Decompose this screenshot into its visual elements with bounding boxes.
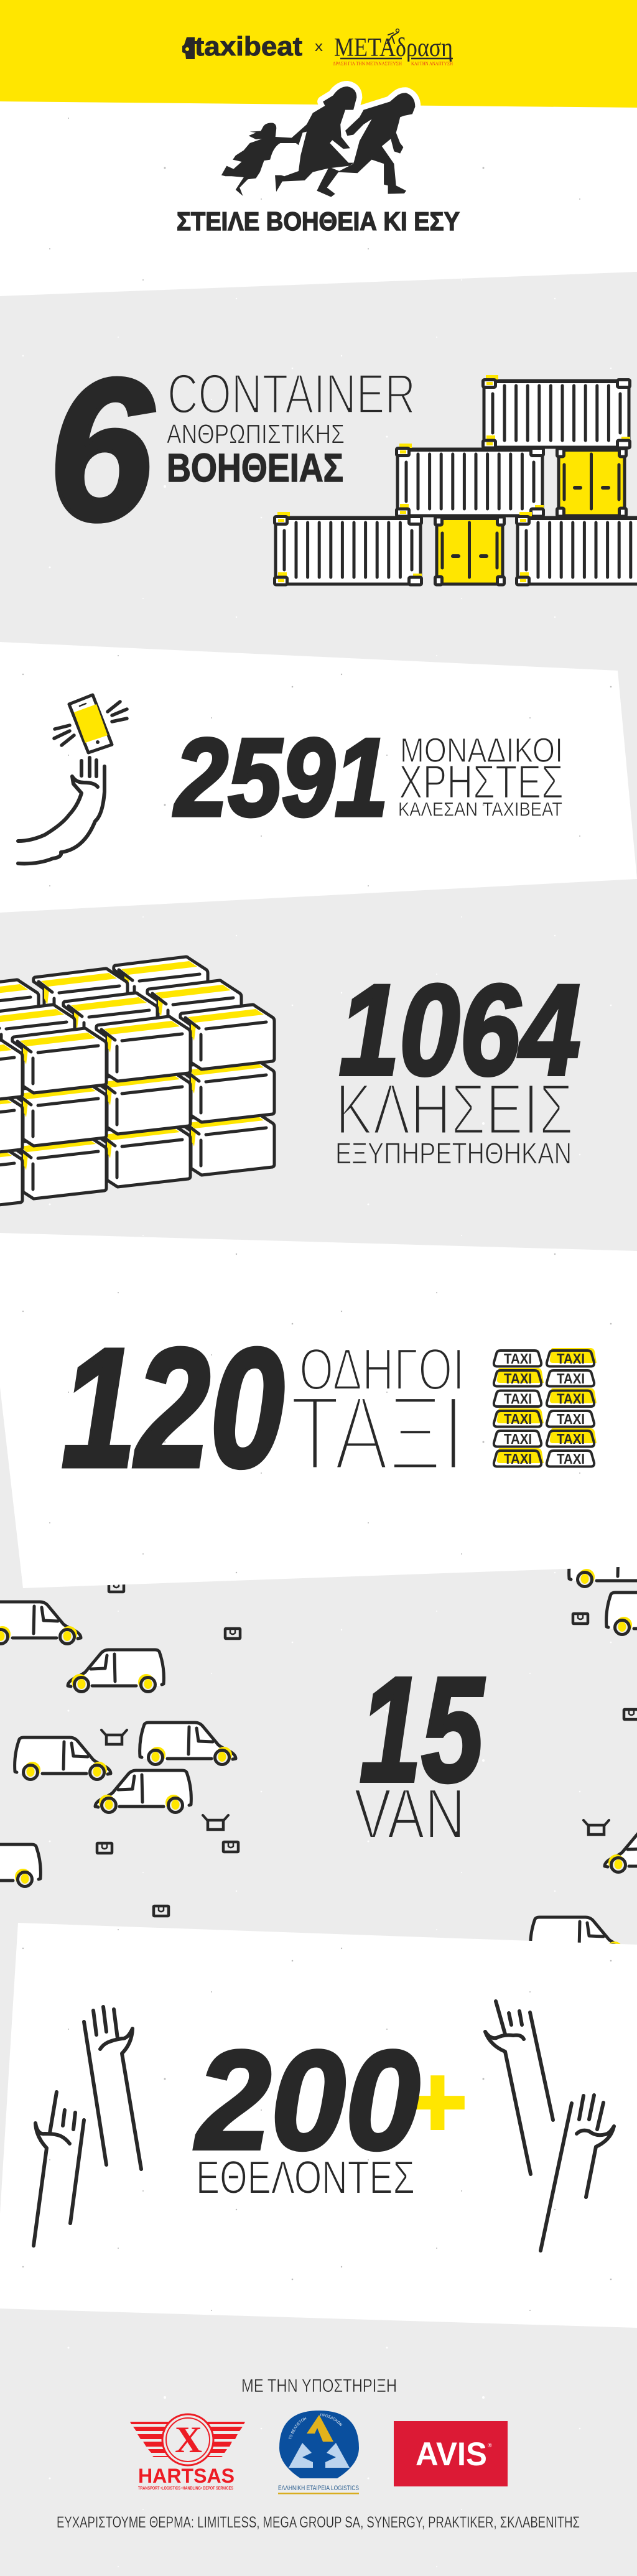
- sign r3c1: [494, 1391, 541, 1407]
- logo: Avis: [394, 2421, 508, 2486]
- sign r2c2: TAXI: [557, 1370, 585, 1387]
- panel: users white band: [0, 642, 637, 913]
- number: plus sign: +: [406, 2044, 465, 2159]
- sign r5c1: [494, 1431, 541, 1447]
- logo: Hellenic Logistics Association: ΠΡΟΣΔΟΚΩΝ: [320, 2414, 342, 2426]
- number: 15: 15: [360, 1646, 485, 1813]
- sign r1c2: TAXI: [557, 1351, 585, 1367]
- sign r2c1: TAXI: [504, 1370, 532, 1387]
- sign r3c2: TAXI: [557, 1391, 585, 1407]
- container: bottom left: [275, 512, 422, 585]
- sign r4c2: TAXI: [557, 1411, 585, 1427]
- sign r6c1: [494, 1448, 544, 1467]
- text: with the support of: ΜΕ ΤΗΝ ΥΠΟΣΤΗΡΙΞΗ: [241, 2376, 397, 2396]
- box: closed 4: [97, 1843, 112, 1853]
- logo: Avis: ®: [488, 2442, 492, 2448]
- logo: Hartsas: TRANSPORT •LOGISTICS •HANDLING• DEPOT SERVICES: [138, 2485, 233, 2491]
- logo: Metadrasi: ΔΡΑΣΗ ΓΙΑ ΤΗΝ ΜΕΤΑΝΑΣΤΕΥΣΗ: [333, 61, 402, 67]
- text: humanitarian: ΑΝΘΡΩΠΙΣΤΙΚΗΣ: [167, 419, 345, 449]
- van: centre left: [14, 1737, 111, 1779]
- vibration lines: [54, 702, 127, 745]
- box: closed 1: [109, 1582, 124, 1592]
- icon: raised hand, far left: [34, 2092, 84, 2246]
- text: called taxibeat: ΚΑΛΕΣΑΝ TAXIBEAT: [398, 797, 562, 820]
- icon: raised hand, inner right: [485, 2001, 553, 2174]
- sign r5c2: [547, 1428, 597, 1447]
- text: users: ΧΡΗΣΤΕΣ: [399, 756, 564, 809]
- illustration: stacked cardboard boxes: [0, 957, 274, 1211]
- sign r2c2: [547, 1370, 594, 1387]
- van: upper left: [0, 1602, 81, 1644]
- van: right edge: [606, 1593, 637, 1635]
- sign r1c1: [494, 1351, 541, 1367]
- box: open 2: [203, 1815, 228, 1830]
- sign r4c1: TAXI: [504, 1411, 532, 1427]
- panel: intro white band: [0, 101, 637, 296]
- container: middle door: [557, 448, 626, 516]
- text: taxi: ΤΑΞΙ: [290, 1374, 465, 1493]
- van: lower right: [605, 1830, 637, 1872]
- icon: running family silhouette: [221, 86, 415, 197]
- box: closed 6: [154, 1906, 169, 1916]
- panel: volunteers white band: [0, 1923, 637, 2328]
- text: unique: ΜΟΝΑΔΙΚΟΙ: [400, 730, 563, 770]
- sign r5c1: TAXI: [504, 1431, 532, 1447]
- sign r6c2: TAXI: [557, 1451, 585, 1467]
- number: 120: 120: [62, 1313, 284, 1502]
- text: served: ΕΞΥΠΗΡΕΤΗΘΗΚΑΝ: [335, 1137, 572, 1171]
- number: 2591: 2591: [173, 715, 388, 839]
- text: aid: ΒΟΗΘΕΙΑΣ: [167, 445, 343, 490]
- logo: Hartsas: HARTSAS: [138, 2465, 235, 2487]
- icon grid: taxi roof signs: [494, 1348, 597, 1467]
- panel: yellow header band: [0, 0, 637, 108]
- number: 1064: 1064: [339, 958, 580, 1102]
- container: bottom right: [516, 512, 637, 585]
- box: closed 3: [573, 1614, 588, 1624]
- van: bottom right clipped: [530, 1917, 626, 1960]
- text: cross mark between logos: x: [315, 39, 323, 54]
- van: lower left clipped: [0, 1844, 41, 1886]
- logo: taxibeat: taxibeat: [195, 32, 302, 62]
- number: 6 containers: 6: [49, 337, 154, 562]
- van: centre lower: [95, 1770, 192, 1813]
- logo: Hartsas: [130, 2414, 245, 2491]
- box: open 3: [584, 1820, 609, 1834]
- van: top right: [569, 1545, 637, 1586]
- container: middle side: [397, 444, 544, 516]
- logo: Metadrasi: ΚΑΙ ΤΗΝ ΑΝΑΠΤΥΞΗ: [411, 61, 453, 67]
- logo: Hellenic Logistics Association: ΕΛΛΗΝΙΚΗ ΕΤΑΙΡΕΙΑ LOGISTICS: [278, 2485, 359, 2492]
- logo: Metadrasi: ΜΕΤΑδραση: [334, 34, 453, 62]
- sign r3c2: [547, 1388, 597, 1407]
- number: 200: 200: [194, 2021, 420, 2178]
- panel: drivers white band: [0, 1233, 637, 1588]
- van: second left: [68, 1650, 164, 1692]
- box: open 1: [101, 1730, 127, 1744]
- box: closed 2: [225, 1629, 240, 1639]
- text: volunteers: ΕΘΕΛΟΝΤΕΣ: [196, 2151, 415, 2203]
- text: drivers: ΟΔΗΓΟΙ: [299, 1336, 465, 1403]
- box: closed 7: [624, 1709, 637, 1719]
- section 6: vans and boxes illustration on grey band: [0, 1545, 637, 1960]
- sign r3c1: TAXI: [504, 1391, 532, 1407]
- box: closed 5: [223, 1842, 238, 1852]
- icon: hand tossing phone: [18, 695, 127, 863]
- arm and fingers: [18, 758, 105, 863]
- logo: Metadrasi: [333, 29, 453, 67]
- sign r1c1: TAXI: [504, 1351, 532, 1367]
- illustration: stacked containers: [275, 375, 637, 585]
- phone: [69, 695, 112, 753]
- sign r6c1: TAXI: [504, 1451, 532, 1467]
- sign r2c1: [494, 1368, 544, 1387]
- sign r4c2: [547, 1411, 594, 1427]
- icon: raised hand, inner left: [84, 2007, 141, 2169]
- text: CONTAINER: CONTAINER: [167, 363, 416, 425]
- container: top: [483, 375, 630, 448]
- heading: main title: ΣΤΕΙΛΕ ΒΟΗΘΕΙΑ ΚΙ ΕΣΥ: [177, 207, 460, 236]
- icon: raised hand, far right: [541, 2095, 614, 2251]
- sign r1c2: [547, 1348, 597, 1367]
- sign r4c1: [494, 1408, 544, 1427]
- logo: Avis: AVIS: [416, 2436, 487, 2473]
- logo: Hellenic Logistics Association: [278, 2411, 359, 2495]
- sign r5c2: TAXI: [557, 1431, 585, 1447]
- text: calls: ΚΛΗΣΕΙΣ: [335, 1069, 574, 1150]
- text: VAN: VAN: [354, 1775, 465, 1854]
- van: centre right: [139, 1723, 236, 1764]
- sign r6c2: [547, 1451, 594, 1467]
- logo: Hellenic Logistics Association: ΤΟ ΒΕΛΤΙΣΤΟΝ: [289, 2417, 307, 2439]
- container: bottom door: [435, 516, 504, 585]
- logo: Hartsas: X: [175, 2419, 202, 2460]
